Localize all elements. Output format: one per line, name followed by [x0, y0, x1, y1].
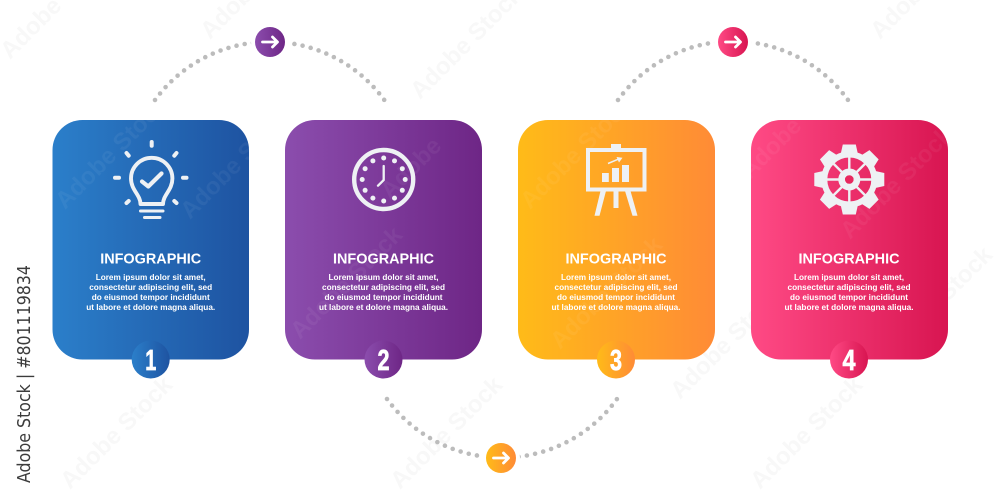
text block: consectetur adipiscing elit, sed	[89, 282, 212, 292]
number badge 2: 2	[378, 345, 390, 377]
arc connector 1 to 2	[155, 42, 384, 100]
stock id side label: Adobe Stock | #801119834	[14, 265, 35, 483]
arrow badge: purple	[251, 23, 289, 61]
arrow badge: pink	[714, 23, 752, 61]
number badge 1: 1	[145, 345, 156, 377]
panel: step 4	[751, 120, 948, 378]
text block: consectetur adipiscing elit, sed	[322, 282, 445, 292]
text block: ut labore et dolore magna aliqua.	[86, 302, 215, 312]
text block: do eiusmod tempor incididunt	[557, 292, 675, 302]
heading: INFOGRAPHIC	[798, 250, 900, 268]
watermark pattern over cards	[50, 91, 958, 354]
watermark pattern on background: Adobe Stock	[55, 371, 178, 494]
text block: Lorem ipsum dolor sit amet,	[561, 272, 671, 282]
watermark pattern over cards: Adobe Stock	[515, 91, 638, 214]
text block: do eiusmod tempor incididunt	[324, 292, 443, 302]
text block: do eiusmod tempor incididunt	[790, 292, 908, 302]
text block: consectetur adipiscing elit, sed	[788, 282, 910, 292]
watermark pattern over cards: Adobe Stock	[50, 91, 173, 214]
text block: Lorem ipsum dolor sit amet,	[794, 272, 904, 282]
text block: do eiusmod tempor incididunt	[92, 292, 210, 302]
text block: consectetur adipiscing elit, sed	[554, 282, 678, 292]
watermark pattern over cards: Adobe Stock	[285, 221, 408, 344]
heading: INFOGRAPHIC	[566, 250, 667, 268]
text block: ut labore et dolore magna aliqua.	[552, 302, 680, 312]
heading: INFOGRAPHIC	[333, 250, 434, 268]
text block	[319, 272, 448, 312]
text block	[784, 272, 914, 312]
panel: step 2	[285, 120, 482, 378]
number badge 3	[597, 340, 635, 378]
text block	[86, 272, 215, 312]
watermark pattern over cards: Adobe	[375, 132, 447, 204]
icon: clock	[354, 150, 413, 209]
number badge 1	[132, 340, 170, 378]
icon: presentation board	[588, 144, 644, 216]
text block: Lorem ipsum dolor sit amet,	[96, 272, 206, 282]
arrow badge: orange	[482, 439, 520, 477]
panel: step 3	[518, 120, 715, 378]
number badge 2	[364, 340, 402, 378]
number badge 4: 4	[842, 345, 856, 377]
heading: INFOGRAPHIC	[100, 250, 201, 268]
number badge 3: 3	[610, 345, 622, 377]
number badge 4	[830, 340, 868, 378]
text block: ut labore et dolore magna aliqua.	[784, 302, 914, 312]
watermark pattern over cards: Adobe Stock	[175, 101, 298, 224]
watermark pattern on background: Adobe Stock	[875, 241, 998, 364]
text block: ut labore et dolore magna aliqua.	[319, 302, 448, 312]
icon: gear	[814, 144, 884, 214]
watermark pattern over cards: Adobe Stock	[835, 121, 958, 244]
watermark pattern on background: Adobe Stock	[745, 371, 868, 494]
arc connector 3 to 4	[618, 41, 848, 100]
text block: Lorem ipsum dolor sit amet,	[328, 272, 438, 282]
arc connector 2 to 3	[387, 399, 617, 458]
watermark pattern over cards: Adobe Stock	[545, 231, 668, 354]
watermark pattern over cards: Adobe	[735, 112, 807, 184]
watermark pattern on background: Adobe Stock	[385, 371, 508, 494]
watermark pattern on background: Adobe Stock	[665, 281, 788, 404]
panel: step 1	[52, 120, 249, 378]
text block	[552, 272, 680, 312]
icon: light bulb with check	[115, 142, 186, 218]
